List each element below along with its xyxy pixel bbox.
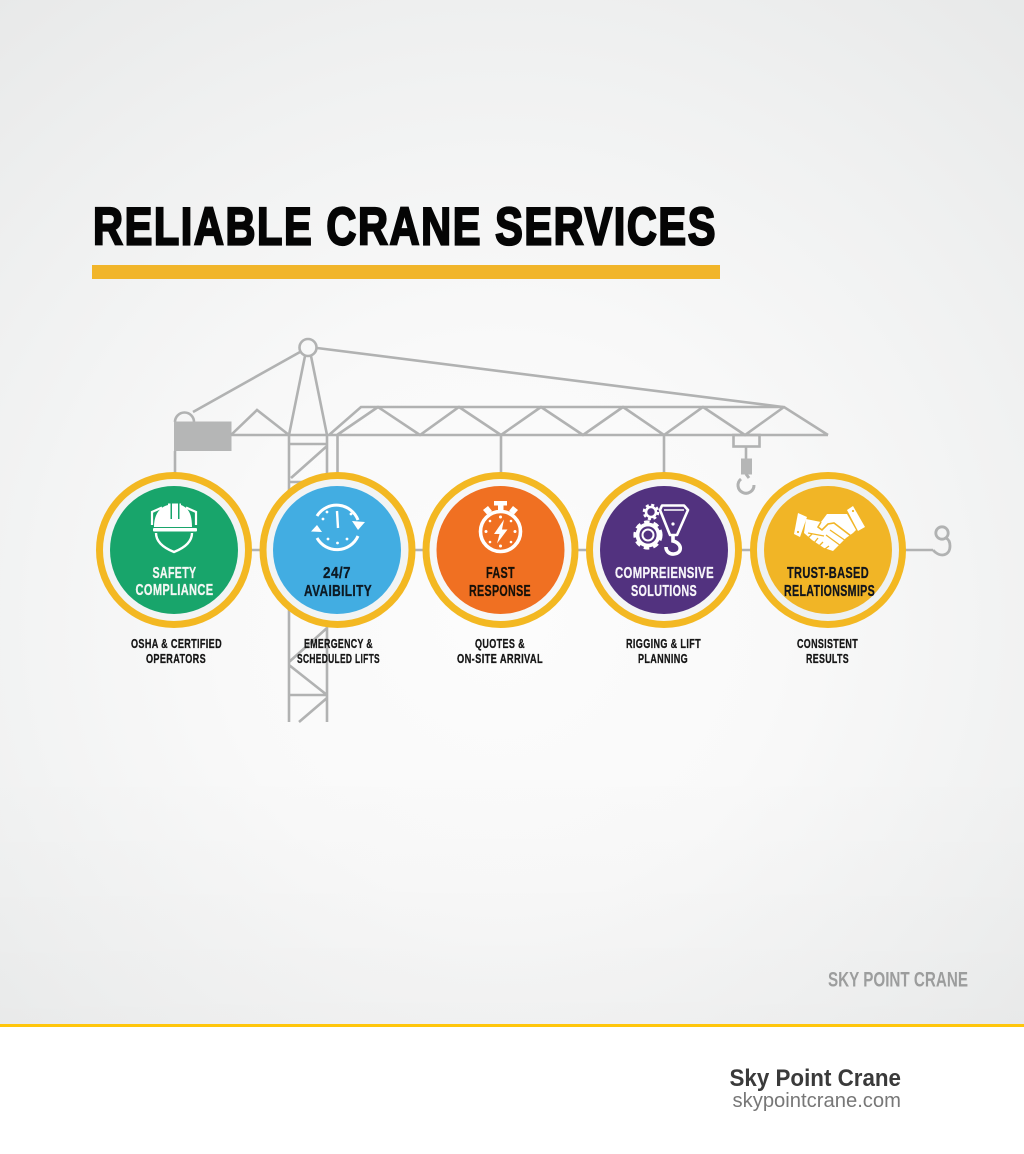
brand name: Sky Point Crane bbox=[730, 1065, 901, 1092]
caption: RESULTS bbox=[806, 651, 849, 666]
step 2: 24/7 availability bbox=[263, 476, 412, 666]
caption bbox=[626, 636, 701, 666]
step 4: comprehensive solutions bbox=[590, 476, 738, 666]
heading bbox=[784, 565, 875, 600]
heading: COMPREIENSIVE bbox=[615, 565, 714, 582]
purple disc bbox=[600, 486, 728, 614]
heading: RELATIONSMIPS bbox=[784, 583, 875, 600]
tower peak bbox=[289, 339, 327, 435]
icon: gears and crane hook bbox=[635, 505, 688, 554]
orange disc bbox=[436, 486, 564, 614]
yellow disc bbox=[764, 486, 892, 614]
caption: SCHEDULED LIFTS bbox=[297, 651, 380, 666]
watermark: SKY POINT CRANE bbox=[828, 968, 968, 992]
caption: ON-SITE ARRIVAL bbox=[457, 651, 543, 666]
icon: handshake bbox=[794, 506, 865, 551]
icon: clock with arrows bbox=[311, 505, 365, 550]
trolley and hook bbox=[734, 435, 760, 493]
footer brand bbox=[730, 1065, 901, 1112]
step 3: fast response bbox=[426, 476, 575, 666]
caption: EMERGENCY & bbox=[304, 636, 373, 651]
step 1: safety compliance bbox=[100, 476, 248, 666]
heading: TRUST-BASED bbox=[787, 565, 869, 582]
caption: RIGGING & LIFT bbox=[626, 636, 701, 651]
caption: OPERATORS bbox=[146, 651, 206, 666]
footer panel bbox=[0, 1027, 1024, 1154]
caption: QUOTES & bbox=[475, 636, 525, 651]
heading: RESPONSE bbox=[469, 583, 531, 600]
heading: 24/7 bbox=[323, 565, 351, 582]
blue disc bbox=[273, 486, 401, 614]
drop lines to circles bbox=[175, 435, 664, 474]
jib truss bbox=[231, 407, 828, 435]
counterweight bbox=[174, 413, 232, 451]
caption: CONSISTENT bbox=[797, 636, 858, 651]
ring bbox=[426, 476, 575, 624]
caption bbox=[797, 636, 858, 666]
connector line between circles bbox=[250, 549, 933, 551]
heading: AVAIBILITY bbox=[304, 583, 372, 600]
heading: FAST bbox=[486, 565, 515, 582]
ring bbox=[100, 476, 248, 624]
title underline bar bbox=[92, 265, 720, 279]
icon: stopwatch bbox=[480, 501, 520, 552]
caption bbox=[297, 636, 380, 666]
caption bbox=[131, 636, 222, 666]
green disc bbox=[110, 486, 238, 614]
title: RELIABLE CRANE SERVICES bbox=[93, 198, 717, 256]
heading: SAFETY bbox=[152, 565, 196, 582]
heading bbox=[615, 565, 714, 600]
caption: PLANNING bbox=[638, 651, 688, 666]
heading: SOLUTIONS bbox=[631, 583, 697, 600]
ring bbox=[263, 476, 412, 624]
caption bbox=[457, 636, 543, 666]
heading bbox=[469, 565, 531, 600]
heading: COMPLIANCE bbox=[136, 582, 214, 599]
cables bbox=[193, 348, 783, 412]
icon: hard hat shield bbox=[152, 503, 197, 552]
mast bbox=[289, 435, 327, 722]
website: skypointcrane.com bbox=[732, 1090, 901, 1112]
footer rule bbox=[0, 1024, 1024, 1027]
caption: OSHA & CERTIFIED bbox=[131, 636, 222, 651]
step 5: trust-based relationships bbox=[754, 476, 902, 666]
heading bbox=[304, 565, 372, 600]
end hook bbox=[933, 527, 950, 555]
heading bbox=[136, 565, 214, 599]
ring bbox=[590, 476, 738, 624]
crane line drawing bbox=[174, 339, 950, 722]
ring bbox=[754, 476, 902, 624]
